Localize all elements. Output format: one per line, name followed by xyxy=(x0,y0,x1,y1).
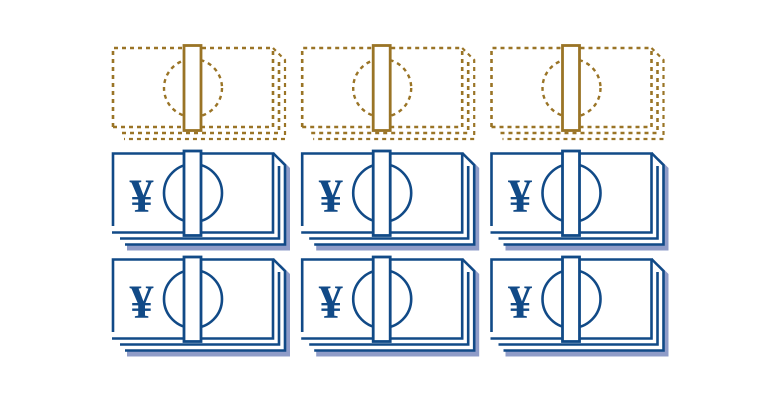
row 2 col 2: yen bill: ¥ xyxy=(319,170,343,223)
row 3 col 3: yen bill: ¥ xyxy=(508,276,532,329)
row 3 col 1: yen bill xyxy=(112,257,290,356)
row 2 col 3: yen bill: ¥ xyxy=(508,170,532,223)
row 3 col 2: yen bill xyxy=(301,257,479,356)
row 2 col 2: yen bill xyxy=(301,151,479,250)
row 2 col 1: yen bill: ¥ xyxy=(130,170,154,223)
row 2 col 3: yen bill xyxy=(490,151,668,250)
row 1 col 2: dashed bill xyxy=(302,46,474,139)
row 3 col 2: yen bill: ¥ xyxy=(319,276,343,329)
row 2 col 1: yen bill xyxy=(112,151,290,250)
row 1 col 1: dashed bill xyxy=(113,46,285,139)
row 1 col 3: dashed bill xyxy=(492,46,664,139)
row 3 col 3: yen bill xyxy=(490,257,668,356)
row 3 col 1: yen bill: ¥ xyxy=(130,276,154,329)
